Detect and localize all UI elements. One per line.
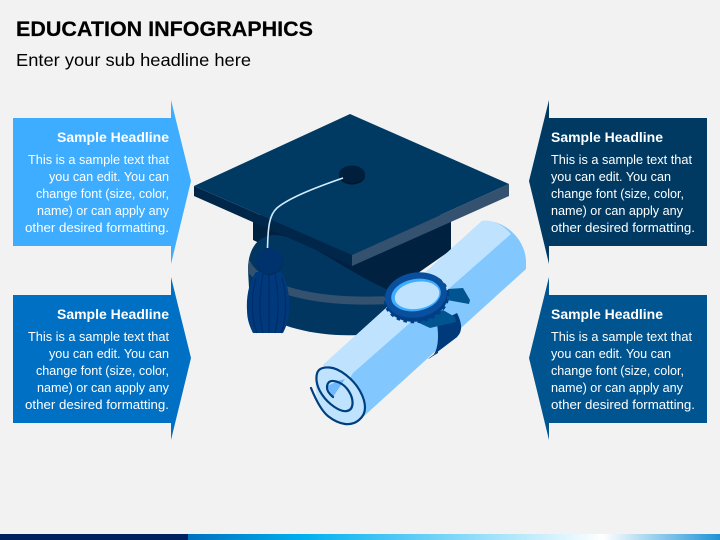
body text: you can edit. You can <box>551 169 671 184</box>
scroll band back <box>428 303 461 359</box>
footer bar <box>0 534 720 540</box>
arrow shape <box>13 100 191 264</box>
icon: graduation cap <box>194 114 509 335</box>
body text: This is a sample text that <box>28 152 169 167</box>
body text: other desired formatting. <box>25 220 169 235</box>
body text: you can edit. You can <box>49 346 169 361</box>
body text: This is a sample text that <box>551 329 692 344</box>
panel: top right <box>529 100 707 264</box>
body text <box>25 329 170 412</box>
cord <box>268 178 343 248</box>
board top <box>194 114 509 255</box>
body text: change font (size, color, <box>36 186 169 201</box>
body text: name) or can apply any <box>37 380 170 395</box>
body text: name) or can apply any <box>551 203 684 218</box>
body text: This is a sample text that <box>28 329 169 344</box>
body text: name) or can apply any <box>37 203 170 218</box>
scroll band front <box>428 313 461 359</box>
title: EDUCATION INFOGRAPHICS <box>16 17 313 41</box>
body text: you can edit. You can <box>49 169 169 184</box>
headline: Sample Headline <box>57 129 169 145</box>
arrow shape <box>529 100 707 264</box>
body text: This is a sample text that <box>551 152 692 167</box>
body text: other desired formatting. <box>551 397 695 412</box>
cap base <box>248 235 400 335</box>
cap underside <box>253 215 451 296</box>
headline: Sample Headline <box>57 306 169 322</box>
button <box>339 166 365 184</box>
spiral end <box>311 367 365 424</box>
seal <box>382 267 451 326</box>
ribbon tab right <box>447 288 470 304</box>
board left edge <box>194 186 352 266</box>
headline: Sample Headline <box>551 306 663 322</box>
body text: change font (size, color, <box>36 363 169 378</box>
scroll highlight <box>323 221 511 395</box>
body text: other desired formatting. <box>551 220 695 235</box>
body text: you can edit. You can <box>551 346 671 361</box>
arrow shape <box>13 277 191 440</box>
panel: bottom right <box>529 277 707 440</box>
panel: bottom left <box>13 277 191 440</box>
body text <box>551 152 695 235</box>
body text: name) or can apply any <box>551 380 684 395</box>
subtitle: Enter your sub headline here <box>16 50 251 70</box>
body text: change font (size, color, <box>551 186 684 201</box>
body text: other desired formatting. <box>25 397 169 412</box>
cap band <box>246 262 392 301</box>
panel: top left <box>13 100 191 264</box>
body text: change font (size, color, <box>551 363 684 378</box>
icon: diploma scroll <box>311 221 526 424</box>
body text <box>25 152 170 235</box>
scroll body <box>323 221 526 417</box>
ribbon tab lower <box>417 310 456 328</box>
board right edge <box>352 184 509 266</box>
arrow shape <box>529 277 707 440</box>
headline: Sample Headline <box>551 129 663 145</box>
tassel <box>247 248 289 333</box>
body text <box>551 329 695 412</box>
